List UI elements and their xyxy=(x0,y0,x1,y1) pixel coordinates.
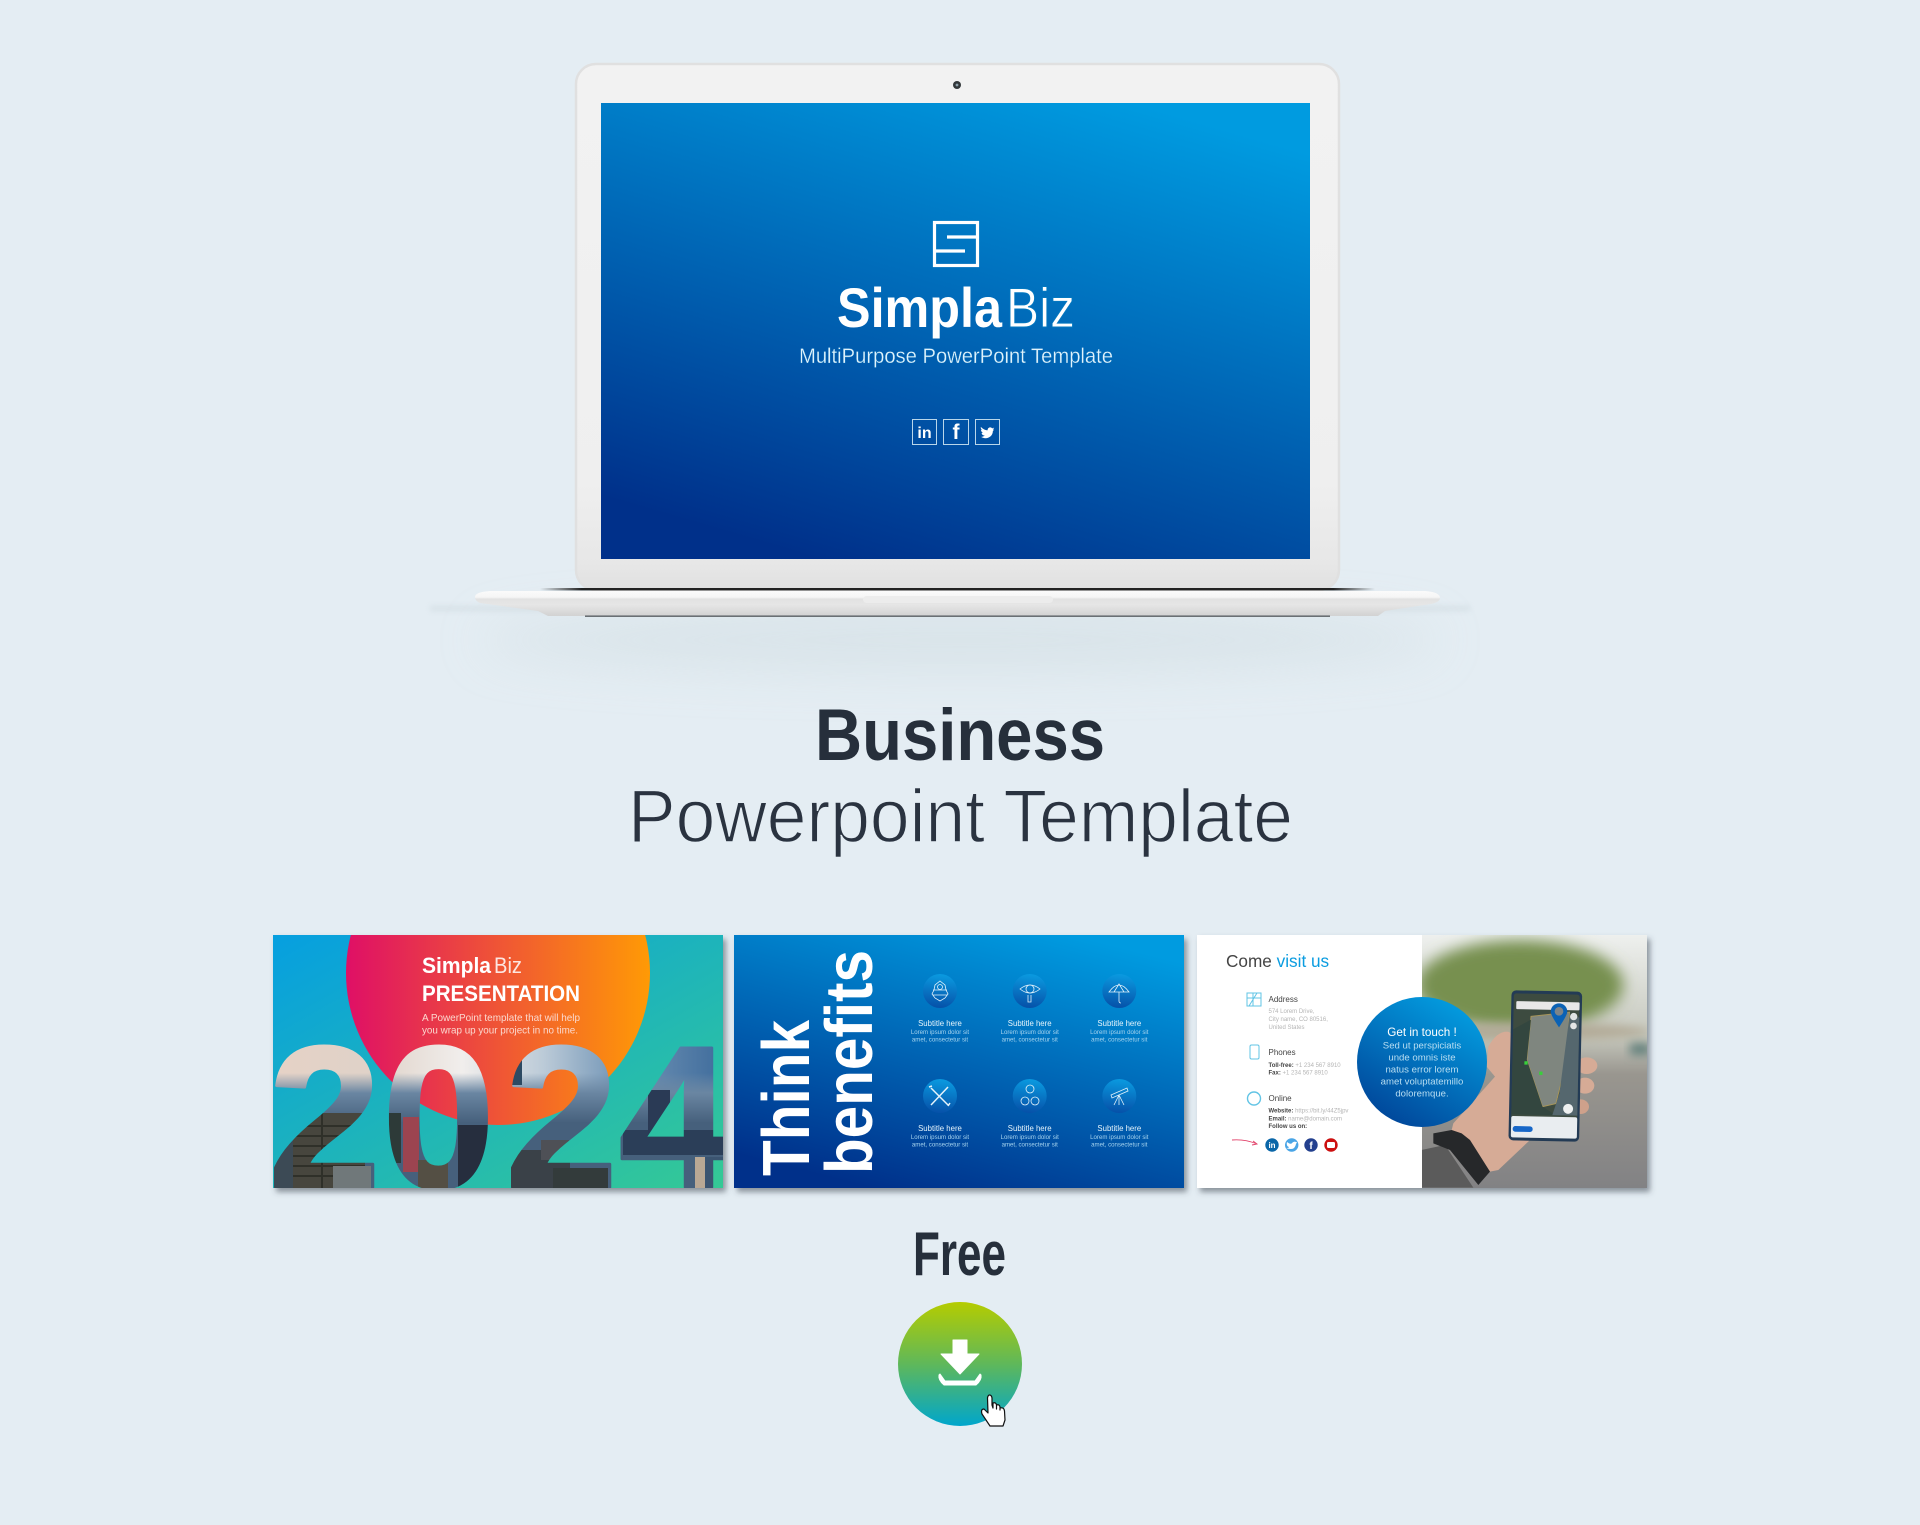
slide 1 description: you wrap up your project in no time. xyxy=(422,1026,578,1036)
big 2024 numerals with city photo xyxy=(274,1044,723,1188)
rotated heading xyxy=(749,950,887,1176)
benefit labels: Lorem ipsum dolor sit xyxy=(1090,1134,1149,1141)
phones block xyxy=(1250,1045,1341,1077)
slide card: come visit us xyxy=(1197,935,1650,1188)
label: Free: Free xyxy=(913,1220,1006,1289)
slide 1 description xyxy=(422,1013,580,1036)
benefit labels: Subtitle here xyxy=(918,1124,962,1133)
slide 3 white panel xyxy=(1197,935,1422,1188)
icon: download arrow xyxy=(939,1340,981,1385)
slide card: 2024 presentation xyxy=(272,935,730,1196)
icon circles xyxy=(923,974,1136,1113)
benefit labels: amet, consectetur sit xyxy=(1091,1036,1148,1044)
benefit labels: Lorem ipsum dolor sit xyxy=(911,1134,969,1141)
slide 1 heading: PRESENTATION xyxy=(422,981,580,1006)
online block: Website: https://bit.ly/44Z5jpv xyxy=(1268,1109,1348,1115)
get in touch circle: Get in touch ! xyxy=(1387,1026,1457,1039)
download button xyxy=(898,1302,1022,1426)
online block: Email: name@domain.com xyxy=(1268,1116,1342,1122)
slide 1 background xyxy=(273,935,723,1188)
benefit labels: Subtitle here xyxy=(918,1019,962,1028)
slide 2 background xyxy=(734,935,1184,1188)
benefit labels: Lorem ipsum dolor sit xyxy=(1001,1134,1059,1141)
sunset gradient circle xyxy=(346,821,650,1125)
benefit labels: amet, consectetur sit xyxy=(912,1142,968,1148)
get in touch circle: amet voluptatemillo xyxy=(1381,1077,1463,1088)
online block xyxy=(1248,1092,1348,1130)
slide 1 heading: Biz xyxy=(494,953,522,978)
address block: City name, CO 80516, xyxy=(1268,1017,1328,1023)
benefit labels: Subtitle here xyxy=(1008,1019,1052,1028)
laptop base xyxy=(475,588,1440,617)
line icons xyxy=(929,981,1129,1106)
slide 1 heading: Simpla xyxy=(422,953,492,978)
get in touch circle xyxy=(1357,997,1487,1127)
screen title: Biz xyxy=(1006,276,1075,339)
address block: 574 Lorem Drive, xyxy=(1268,1009,1315,1015)
address block: United States xyxy=(1268,1025,1305,1031)
benefit labels: amet, consectetur sit xyxy=(1002,1142,1058,1148)
screen subtitle: MultiPurpose PowerPoint Template xyxy=(799,345,1113,368)
slide card: think benefits xyxy=(734,935,1184,1188)
heading: Business: Business xyxy=(815,695,1105,776)
address block xyxy=(1247,993,1328,1031)
laptop lid bezel xyxy=(576,64,1339,590)
get in touch circle: unde omnis iste xyxy=(1388,1053,1456,1064)
benefit labels: Lorem ipsum dolor sit xyxy=(1001,1029,1059,1036)
laptop screen xyxy=(601,103,1310,559)
phones block: Phones xyxy=(1268,1048,1296,1057)
benefit labels: Subtitle here xyxy=(1008,1124,1052,1133)
phones block: Fax: +1 234 567 8910 xyxy=(1268,1071,1328,1077)
benefit labels: Subtitle here xyxy=(1097,1124,1141,1133)
get in touch circle: doloremque. xyxy=(1395,1089,1449,1100)
laptop shadow xyxy=(430,606,1470,670)
benefit labels xyxy=(911,1019,1149,1148)
webcam xyxy=(953,81,961,89)
slide 1 description: A PowerPoint template that will help xyxy=(422,1013,580,1024)
get in touch circle: natus error lorem xyxy=(1385,1065,1459,1076)
rotated heading: Think xyxy=(749,1019,824,1176)
heading: Powerpoint Template: Powerpoint Template xyxy=(628,774,1293,858)
address block: Address xyxy=(1268,995,1298,1004)
online block: Follow us on: xyxy=(1268,1124,1307,1130)
screen logo xyxy=(934,222,979,266)
benefit labels: amet, consectetur sit xyxy=(912,1036,968,1044)
phones block: Toll-free: +1 234 567 8910 xyxy=(1268,1063,1341,1069)
screen social icons: f xyxy=(952,421,960,444)
benefit labels: amet, consectetur sit xyxy=(1091,1142,1148,1148)
benefit labels: Lorem ipsum dolor sit xyxy=(911,1029,969,1036)
slide 3 heading: Come visit us xyxy=(1226,951,1329,971)
social icons xyxy=(1265,1138,1338,1152)
benefit labels: amet, consectetur sit xyxy=(1002,1036,1058,1044)
benefit labels: Lorem ipsum dolor sit xyxy=(1090,1029,1149,1036)
social icons: in xyxy=(1268,1141,1276,1150)
social icons: f xyxy=(1309,1141,1313,1152)
get in touch circle: Sed ut perspiciatis xyxy=(1383,1041,1461,1052)
screen title: Simpla xyxy=(837,276,1003,339)
benefit labels: Subtitle here xyxy=(1097,1019,1141,1028)
arrow xyxy=(1232,1140,1257,1145)
phone photo xyxy=(1410,935,1650,1188)
icon: hand cursor xyxy=(982,1395,1005,1426)
laptop mockup xyxy=(430,64,1470,670)
screen social icons xyxy=(912,420,1000,444)
screen social icons: in xyxy=(917,425,932,442)
slide 1 heading xyxy=(422,953,580,1006)
online block: Online xyxy=(1268,1094,1292,1103)
